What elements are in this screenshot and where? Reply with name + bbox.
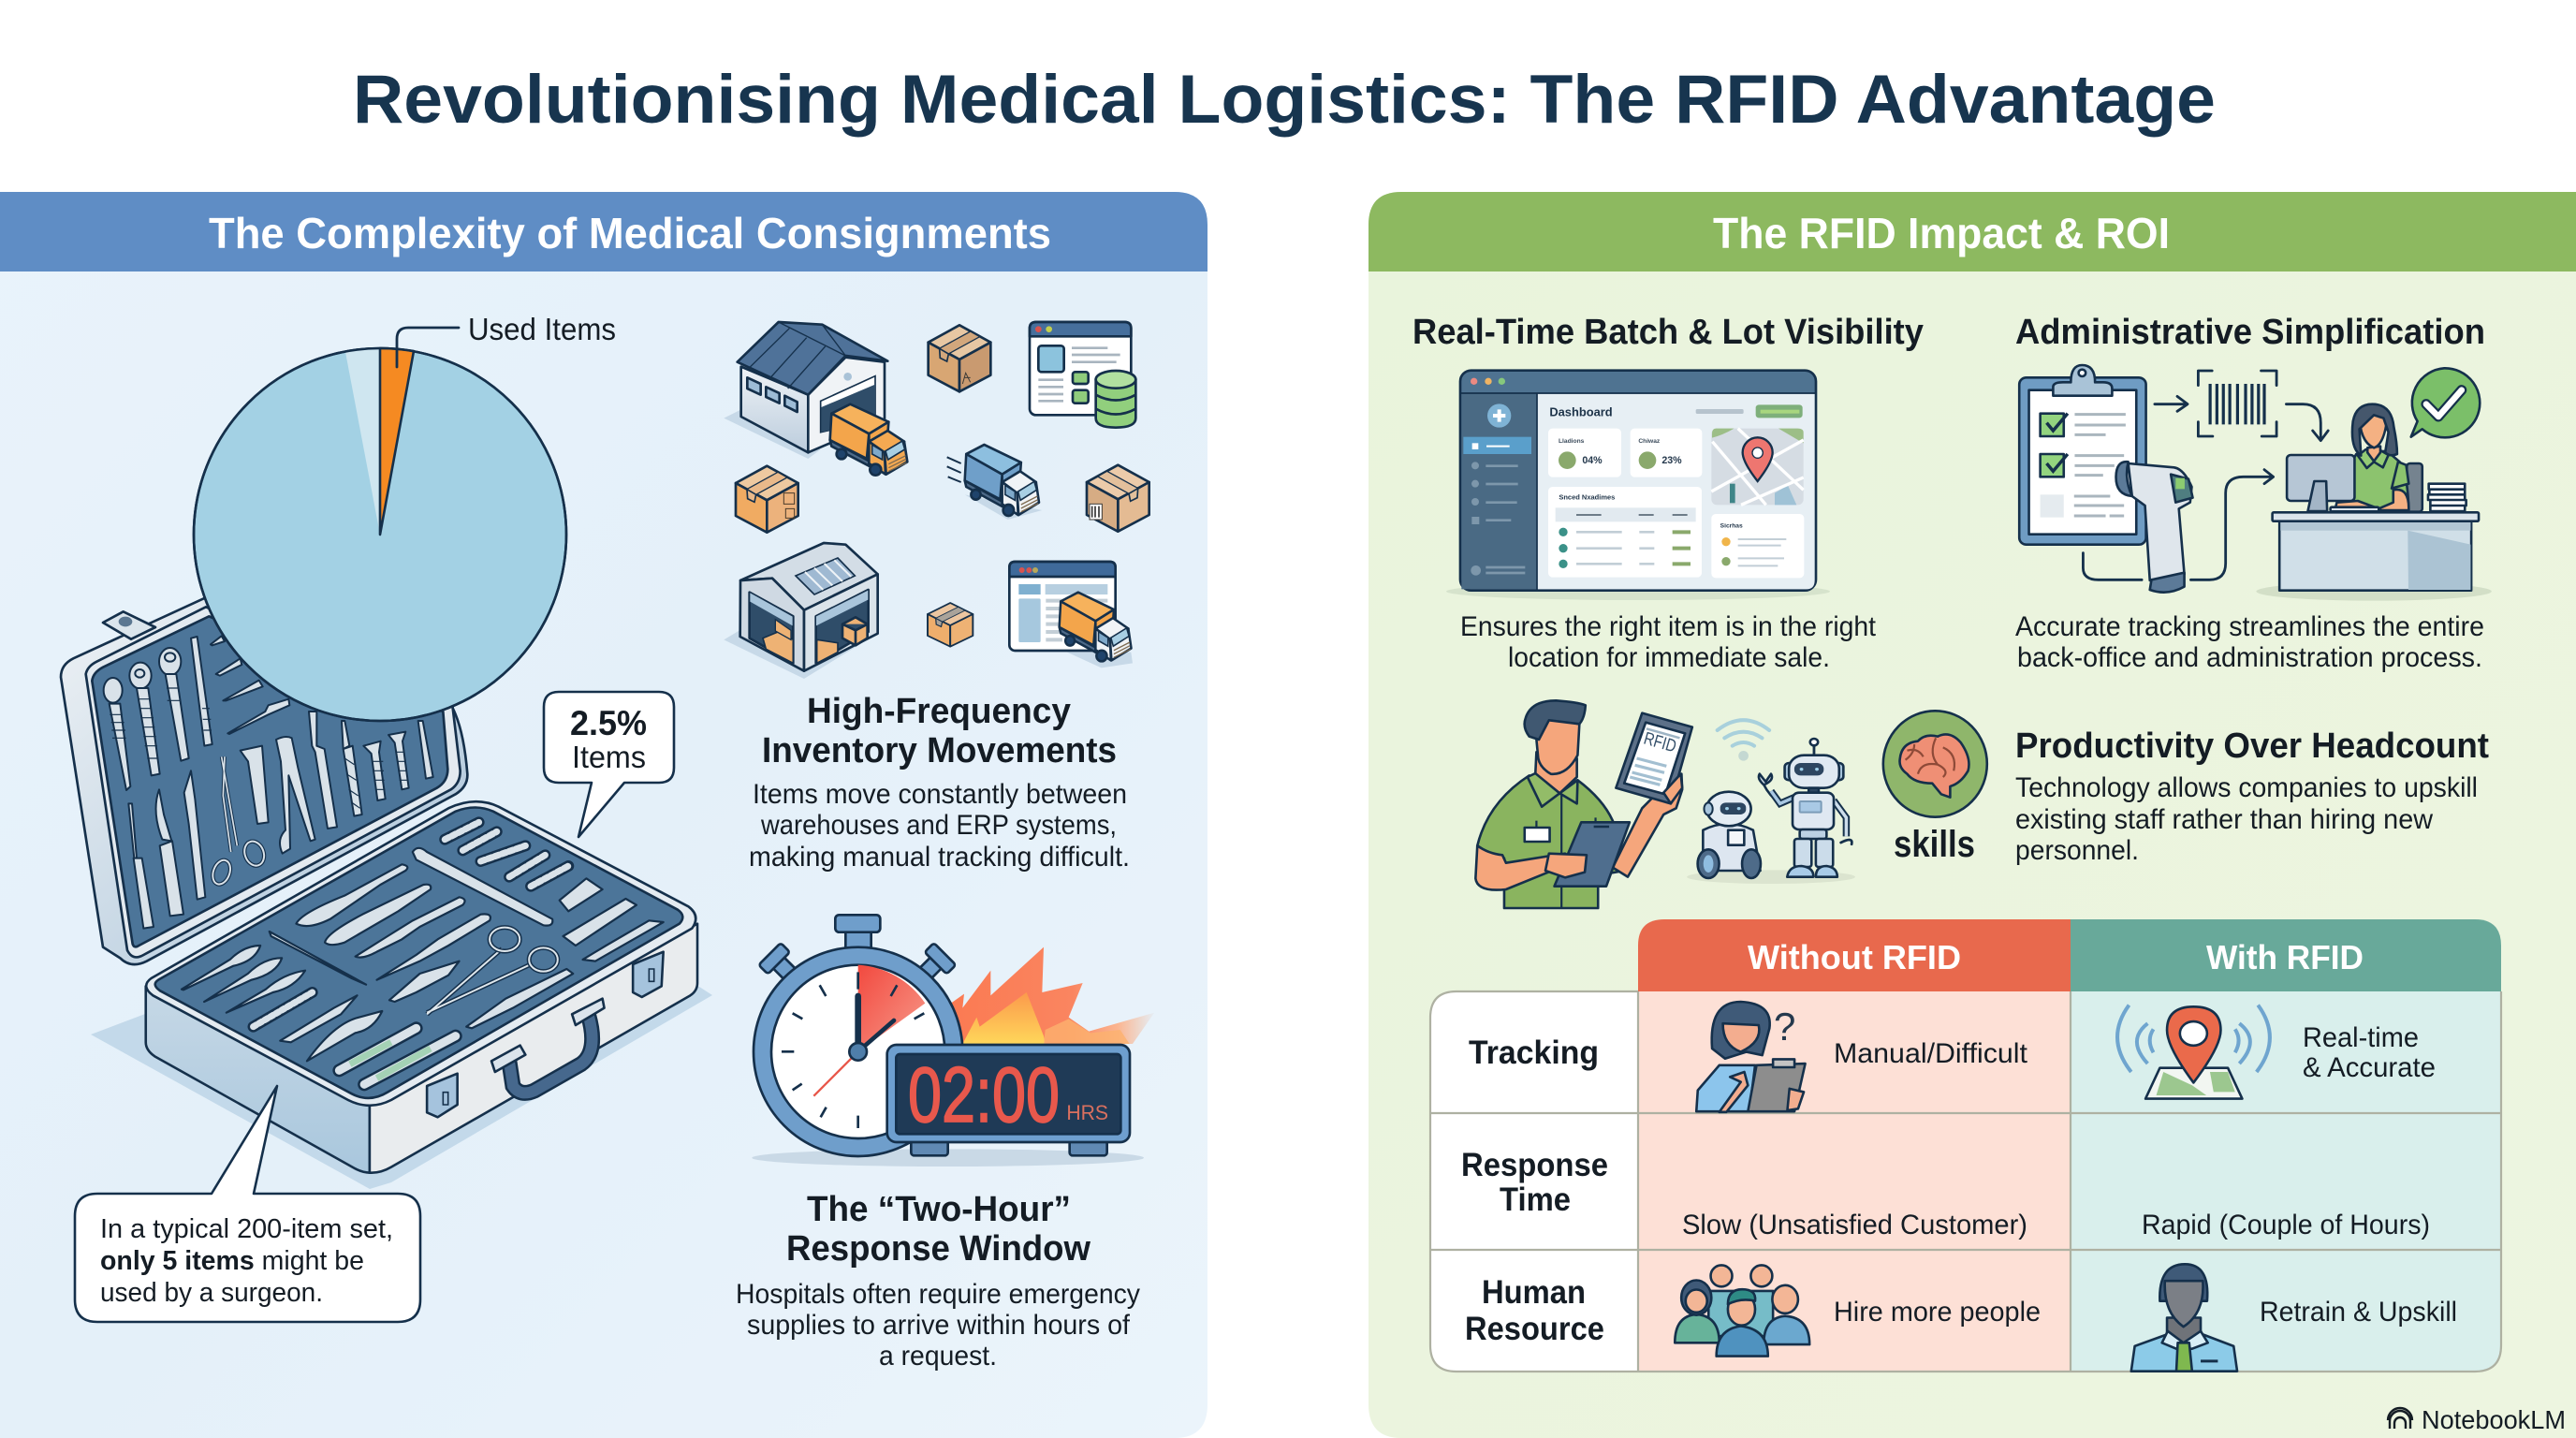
text: productivity description — [2015, 772, 2478, 866]
illustration: dashboard screen: Snced Nxadimes — [1559, 495, 1615, 502]
callout: 200-item set: In a typical 200-item set, — [100, 1214, 393, 1244]
illustration: dashboard screen — [1446, 371, 1830, 600]
icon: confused woman with clipboard — [1696, 1002, 1806, 1112]
ERP screen with database — [1030, 322, 1135, 428]
icon: location pin with signal waves — [2117, 1005, 2270, 1099]
heading: administrative simplification: Administrative Simplification — [2015, 313, 2485, 352]
text: hire more people: Hire more people — [1834, 1297, 2041, 1328]
text: productivity description: existing staff rather than hiring new — [2015, 804, 2434, 835]
column header: without RFID: Without RFID — [1748, 938, 1961, 976]
chart: pie of used items — [194, 312, 616, 721]
illustration: worker with RFID tablet and robots — [1475, 700, 1987, 908]
case shadow — [91, 985, 712, 1189]
illustration: dashboard screen: Sicrhas — [1720, 522, 1743, 529]
panel header: RFID impact — [1368, 192, 2576, 271]
heading: two-hour response window: The “Two-Hour” — [807, 1190, 1071, 1229]
text: administration description: back-office and administration process. — [2017, 642, 2482, 673]
text: retrain and upskill: Retrain & Upskill — [2260, 1297, 2457, 1328]
heading: two-hour response window — [786, 1190, 1090, 1269]
text: real-time and accurate — [2303, 1022, 2436, 1083]
text: rapid response: Rapid (Couple of Hours) — [2142, 1210, 2430, 1240]
row labels — [1461, 1034, 1608, 1347]
text: real-time and accurate: Real-time — [2303, 1022, 2419, 1053]
illustration: dashboard screen: Dashboard — [1549, 405, 1613, 418]
text: real-time and accurate: & Accurate — [2303, 1052, 2436, 1083]
heading: high-frequency inventory movements: High-Frequency — [807, 692, 1071, 731]
case base with instruments — [146, 801, 697, 1173]
icon: group of new hires — [1675, 1265, 1809, 1357]
column header: with RFID — [2071, 919, 2501, 991]
panel header: complexity: The Complexity of Medical Consignments — [209, 209, 1051, 257]
illustration: warehouses, trucks, parcels and ERP screens — [724, 322, 1149, 679]
callout: 200-item set — [75, 1086, 420, 1322]
row labels: Tracking — [1469, 1034, 1599, 1071]
illustration: dashboard screen: 04% — [1582, 455, 1603, 466]
text: inventory movements description: making manual tracking difficult. — [749, 842, 1130, 873]
row labels: Response — [1461, 1147, 1608, 1183]
text: slow response: Slow (Unsatisfied Customer) — [1682, 1210, 2027, 1240]
heading: productivity over headcount: Productivity Over Headcount — [2015, 726, 2489, 766]
column header: with RFID: With RFID — [2206, 938, 2364, 976]
column header: without RFID — [1638, 919, 2071, 991]
screen with orange truck — [1009, 562, 1133, 668]
text: administration description: Accurate tracking streamlines the entire — [2015, 611, 2484, 642]
panel header: RFID impact: The RFID Impact & ROI — [1713, 209, 2170, 257]
icon: upskilled professional — [2131, 1264, 2237, 1372]
panel: complexity of medical consignments — [0, 192, 1208, 1438]
panel header: complexity — [0, 192, 1208, 271]
comparison table: without vs with RFID — [1430, 919, 2501, 1372]
icon: confused woman with clipboard: ? — [1774, 1005, 1795, 1049]
text: visibility description: Ensures the right item is in the right — [1460, 611, 1876, 642]
text: inventory movements description: Items move constantly between — [753, 779, 1127, 810]
pie label: used items: Used Items — [468, 312, 616, 346]
callout: 200-item set: only 5 items might be — [100, 1246, 364, 1276]
callout: 2.5% items — [544, 692, 674, 837]
text: inventory movements description: warehouses and ERP systems, — [760, 810, 1117, 841]
text: manual/difficult: Manual/Difficult — [1834, 1038, 2028, 1069]
illustration: dashboard screen: Lladions — [1559, 438, 1585, 445]
tablet label: RFID: RFID — [1642, 729, 1678, 756]
pie label: used items — [397, 312, 616, 367]
text: inventory movements description — [749, 779, 1130, 873]
warehouse with open loading doors — [724, 543, 878, 679]
text: response window description: Hospitals often require emergency — [736, 1279, 1140, 1310]
digital readout: 02:00 — [908, 1051, 1060, 1138]
text: visibility description — [1460, 611, 1876, 673]
callout: 200-item set: used by a surgeon. — [100, 1278, 323, 1308]
illustration: dashboard screen: 23% — [1661, 455, 1682, 466]
text: response window description: supplies to arrive within hours of — [747, 1310, 1131, 1341]
heading: two-hour response window: Response Window — [786, 1229, 1090, 1269]
blue delivery truck — [947, 445, 1042, 520]
illustration: clipboard, scanner and office worker — [2019, 365, 2492, 601]
callout: 2.5% items: Items — [572, 740, 646, 774]
title: Revolutionising Medical Logistics: The RFID Advantage — [353, 62, 2216, 138]
text: productivity description: personnel. — [2015, 835, 2139, 866]
heading: real-time batch and lot visibility: Real-Time Batch & Lot Visibility — [1412, 313, 1924, 352]
illustration: stopwatch, flames and digital clock — [752, 915, 1154, 1167]
heading: high-frequency inventory movements — [762, 692, 1117, 770]
text: productivity description: Technology allows companies to upskill — [2015, 772, 2478, 803]
digital readout: HRS — [1066, 1101, 1108, 1124]
row labels: Time — [1500, 1181, 1571, 1218]
row labels: Resource — [1465, 1311, 1604, 1347]
panel: RFID impact and ROI — [1368, 192, 2576, 1438]
illustration: dashboard screen: Chiwaz — [1638, 438, 1661, 445]
brand mark: NotebookLM: NotebookLM — [2422, 1405, 2566, 1434]
text: response window description — [736, 1279, 1140, 1372]
illustration: open surgical instrument case — [61, 596, 712, 1189]
case lid with instruments — [61, 596, 467, 964]
text: administration description — [2015, 611, 2484, 673]
heading: high-frequency inventory movements: Inventory Movements — [762, 731, 1117, 770]
label: skills: skills — [1894, 824, 1975, 865]
text: visibility description: location for immediate sale. — [1508, 642, 1830, 673]
row labels: Human — [1482, 1274, 1586, 1311]
text: response window description: a request. — [879, 1341, 997, 1372]
callout: 2.5% items: 2.5% — [570, 704, 647, 742]
